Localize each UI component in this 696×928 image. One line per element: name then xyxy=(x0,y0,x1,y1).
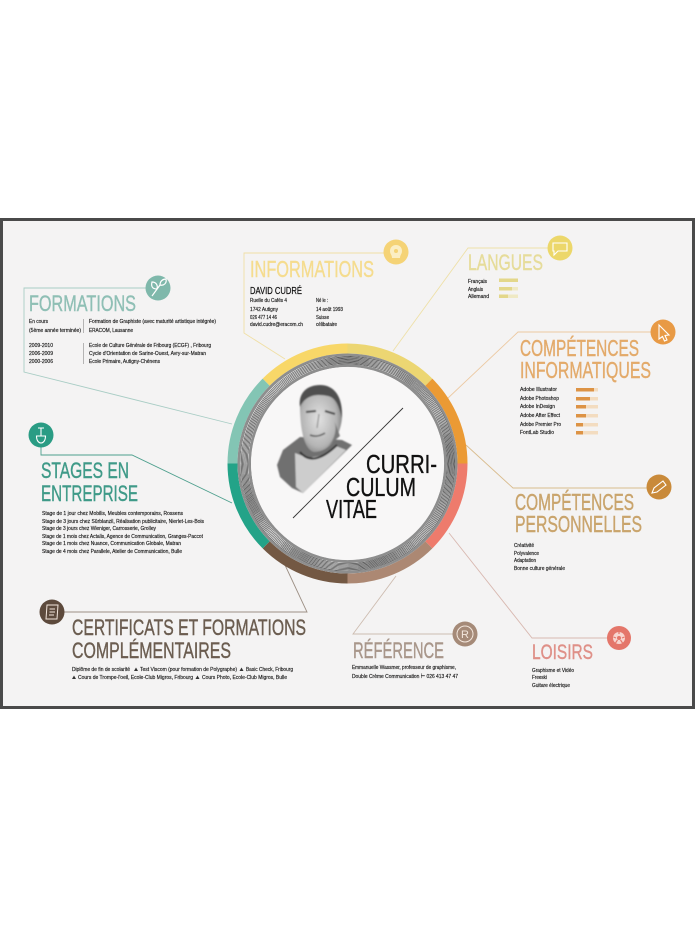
icon: football xyxy=(607,626,631,650)
icon: shovel xyxy=(28,422,54,448)
diagonal rule xyxy=(293,408,403,518)
heading: competences informatiques: COMPÉTENCES xyxy=(520,335,639,361)
language list xyxy=(468,278,518,300)
formations text: En cours xyxy=(29,319,48,325)
software skill bars: Adobe Premier Pro xyxy=(520,422,561,428)
heading: loisirs: LOISIRS xyxy=(532,640,593,664)
hobbies list xyxy=(532,668,574,689)
formations text: 2009-2010 xyxy=(29,343,53,349)
infographic canvas xyxy=(0,218,695,709)
language list: Allemand xyxy=(468,294,489,300)
heading: reference: RÉFÉRENCE xyxy=(353,638,444,663)
icon: sprout xyxy=(146,276,170,300)
formations text: 2006-2009 xyxy=(29,351,53,357)
internships list: Stage de 1 mois chez Actalis, Agence de Communication, Granges-Paccot xyxy=(42,534,203,540)
title: curriculum vitae: VITAE xyxy=(326,496,377,524)
personal skills list: Polyvalence xyxy=(514,551,539,557)
heading: competences personnelles xyxy=(515,489,642,537)
contact details: 14 août 1993 xyxy=(316,307,343,313)
formations text: (5ème année terminée) xyxy=(29,328,81,334)
internships list: Stage de 3 jours chez Wieniger, Carrosserie, Grolley xyxy=(42,526,156,532)
icon: cursor xyxy=(650,320,676,344)
panel: informations xyxy=(244,240,408,359)
software skill bars: Adobe Illustrator xyxy=(520,387,557,393)
reference text: Double Crème Communication ⊢ 026 413 47 47 xyxy=(352,673,458,680)
formations text: Formation de Graphiste (avec maturité artistique intégrée) xyxy=(89,319,216,325)
contact details: célibataire xyxy=(316,322,337,328)
panel: formations xyxy=(24,276,232,424)
contact details: 1742 Autigny xyxy=(250,307,278,313)
formations text: 2000-2006 xyxy=(29,359,53,365)
certificates text: Test Viscom (pour formation de Polygraphe) xyxy=(140,667,237,673)
certificates text xyxy=(72,667,293,681)
heading: competences informatiques xyxy=(520,335,651,383)
internships list: Stage de 4 mois chez Parallele, Atelier de Communication, Bulle xyxy=(42,549,182,555)
contact details: Né le : xyxy=(316,298,328,304)
personal skills list xyxy=(514,543,565,572)
language list: Français xyxy=(468,279,487,285)
heading: formations: FORMATIONS xyxy=(29,291,136,316)
panel: langues xyxy=(393,236,572,351)
heading: stages: ENTREPRISE xyxy=(41,481,138,506)
contact details xyxy=(250,298,343,328)
software skill bars: FontLab Studio xyxy=(520,430,554,436)
certificates text: Cours de Trompe-l'oeil, Ecole-Club Migros, Fribourg xyxy=(78,675,193,681)
name: DAVID CUDRÉ xyxy=(250,284,302,297)
poster frame xyxy=(2,220,694,708)
personal skills list: Adaptation xyxy=(514,558,536,564)
white disc xyxy=(251,367,444,560)
internships list: Stage de 1 jour chez Mobilis, Meubles contemporains, Rossens xyxy=(42,511,183,517)
software skill bars: Adobe After Effect xyxy=(520,413,560,419)
reference text xyxy=(352,665,458,680)
panel: reference xyxy=(352,576,478,680)
software skill bars: Adobe Photoshop xyxy=(520,396,559,402)
hobbies list: Graphisme et Vidéo xyxy=(532,668,574,674)
heading: informations: INFORMATIONS xyxy=(250,256,374,282)
software skill bars: Adobe InDesign xyxy=(520,404,555,410)
central circle xyxy=(232,348,462,578)
title: curriculum vitae: CURRI- xyxy=(366,451,437,479)
internships list xyxy=(42,511,204,555)
icon: pencil xyxy=(646,474,672,500)
heading: stages: STAGES EN xyxy=(41,458,129,483)
formations text: ERACOM, Lausanne xyxy=(89,328,133,334)
personal skills list: Bonne culture générale xyxy=(514,566,565,572)
hobbies list: Freeski xyxy=(532,675,547,681)
heading: competences personnelles: PERSONNELLES xyxy=(515,511,642,537)
heading: stages xyxy=(41,458,138,506)
icon: head xyxy=(384,240,408,264)
moire line ring xyxy=(238,354,458,574)
icon: scroll xyxy=(40,600,64,624)
panel: stages xyxy=(28,422,232,555)
internships list: Stage de 1 mois chez Nuance, Communication Globale, Matran xyxy=(42,541,181,547)
icon: registered mark: R xyxy=(461,629,469,641)
panel: loisirs xyxy=(449,533,631,689)
panel: competences informatiques xyxy=(447,320,676,436)
certificates text: Diplôme de fin de scolarité xyxy=(72,667,130,673)
heading: certificats: CERTIFICATS ET FORMATIONS xyxy=(72,615,306,640)
reference text: Emmanuelle Wassmer, professeur de graphisme, xyxy=(352,665,456,671)
heading: certificats: COMPLÉMENTAIRES xyxy=(72,638,231,663)
title: curriculum vitae xyxy=(326,451,437,524)
panel: competences personnelles xyxy=(466,445,672,572)
certificates text: Basic Check, Fribourg xyxy=(246,667,293,673)
title: curriculum vitae: CULUM xyxy=(346,474,416,502)
formations text: Ecole Primaire, Autigny-Chénens xyxy=(89,359,160,365)
software skill bars xyxy=(520,387,598,436)
coloured outer ring xyxy=(232,348,462,578)
heading: langues: LANGUES xyxy=(468,250,543,275)
panel: certificats xyxy=(40,565,307,681)
contact details: Ruelle du Cafés 4 xyxy=(250,298,287,304)
formations text: Cycle d'Orientation de Sarine-Ouest, Avry-sur-Matran xyxy=(89,351,206,357)
certificates text: Cours Photo, Ecole-Club Migros, Bulle xyxy=(202,675,287,681)
grey bands xyxy=(239,355,456,572)
formations text xyxy=(29,319,216,365)
icon: speech bubble xyxy=(548,236,572,260)
contact details: 026 477 14 46 xyxy=(250,315,277,321)
personal skills list: Créativité xyxy=(514,543,534,549)
heading: certificats xyxy=(72,615,306,663)
formations text: Ecole de Culture Générale de Fribourg (ECGF) , Fribourg xyxy=(89,343,211,349)
hobbies list: Guitare électrique xyxy=(532,683,570,689)
language list: Anglais xyxy=(468,287,483,293)
internships list: Stage de 3 jours chez Sûrblanzil, Réalisation publicitaire, Nierlet-Les-Bois xyxy=(42,519,204,525)
contact details: Suisse xyxy=(316,315,329,321)
portrait photo xyxy=(277,385,352,493)
contact details: david.cudre@eracom.ch xyxy=(250,322,303,328)
heading: competences personnelles: COMPÉTENCES xyxy=(515,489,634,515)
